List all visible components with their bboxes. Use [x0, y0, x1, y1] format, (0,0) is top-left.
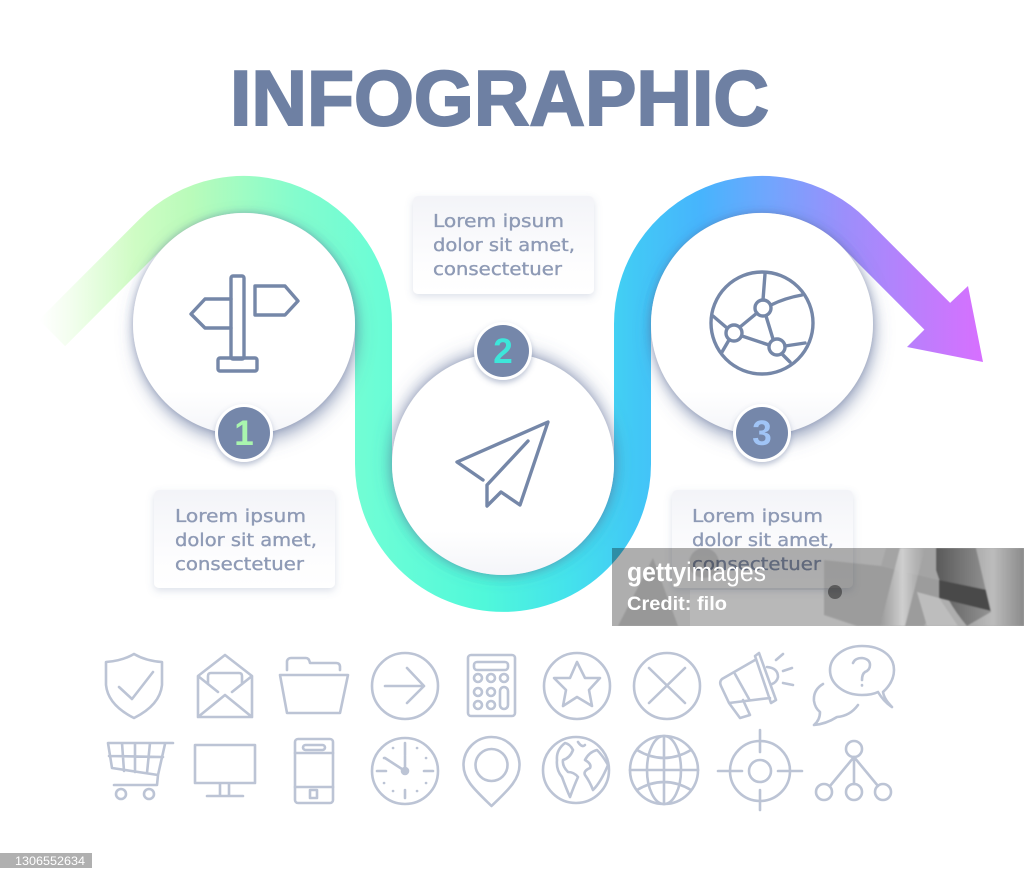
badge 1: 1: [234, 414, 254, 453]
icon: folder: [280, 658, 348, 713]
icon: megaphone: [720, 653, 793, 718]
text card 1: [154, 490, 335, 588]
text card 2: Lorem ipsum: [433, 212, 564, 232]
watermark: gettyimages: [627, 557, 766, 587]
icon: open envelope: [198, 655, 252, 717]
icon: shopping cart: [108, 743, 173, 799]
icon: clock: [372, 738, 438, 804]
icon: cross circle: [634, 653, 700, 719]
badge 3: [733, 404, 791, 462]
icon: crosshair target: [718, 730, 802, 810]
icon: shield: [106, 654, 162, 718]
icon: star circle: [544, 653, 610, 719]
badge 2: 2: [493, 332, 513, 371]
badge 1: [215, 404, 273, 462]
icon: earth: [543, 737, 609, 803]
image id tag: [0, 853, 92, 868]
text card 2: dolor sit amet,: [433, 236, 575, 256]
watermark: Credit: filo: [627, 594, 727, 615]
icon: network globe: [711, 272, 813, 374]
text card 3: [672, 490, 853, 588]
text card 3: dolor sit amet,: [692, 531, 834, 551]
text card 3: Lorem ipsum: [692, 507, 823, 527]
ribbon arrow: [52, 194, 983, 593]
icon: hierarchy nodes: [816, 741, 891, 800]
icon: wire globe: [630, 736, 698, 804]
icon: arrow circle: [372, 653, 438, 719]
step 3 disc: [651, 213, 873, 435]
text card 1: Lorem ipsum: [175, 507, 306, 527]
text card 3: consectetuer: [692, 555, 822, 575]
icon: signpost: [191, 276, 298, 371]
text card 2: [413, 196, 594, 294]
title: INFOGRAPHIC: [230, 54, 769, 142]
icon: smartphone: [295, 739, 333, 803]
icon: monitor: [195, 745, 255, 796]
image id tag: 1306552634: [15, 856, 86, 868]
watermark: [612, 548, 1024, 626]
text card 1: dolor sit amet,: [175, 531, 317, 551]
icon: speech bubbles: [814, 646, 894, 725]
badge 3: 3: [752, 414, 772, 453]
step 1 disc: [133, 213, 355, 435]
icon: paper plane: [457, 422, 548, 506]
icon: map pin: [464, 737, 520, 806]
text card 2: consectetuer: [433, 260, 563, 280]
badge 2: [474, 322, 532, 380]
icon: calculator: [468, 655, 515, 716]
text card 1: consectetuer: [175, 555, 305, 575]
step 2 disc: [392, 353, 614, 575]
